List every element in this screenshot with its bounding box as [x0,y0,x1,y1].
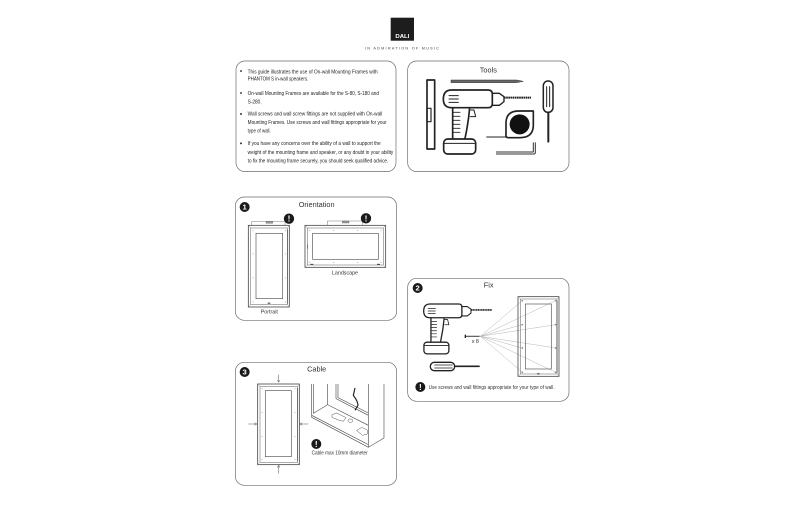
heading: fix: Fix [484,280,494,289]
icon: caution fix: ! [419,382,422,392]
icon: screwdriver [430,362,479,371]
icon: screw [465,335,480,338]
bullet list: This guide illustrates the use of On-wall Mounting Frames with [248,69,378,75]
heading: cable: Cable [307,364,326,373]
logo: DALI [391,18,414,41]
panel: step 1 orientation [235,197,397,320]
icon: allen key [496,142,535,154]
icon: spirit level [427,80,435,149]
icon: screwdriver [543,81,553,142]
diagram: cable recess close-up [312,384,384,447]
label: portrait: Portrait [261,310,278,316]
step badge 2 [413,283,423,293]
bullet list: S-280. [248,99,262,105]
bullet list: Mounting Frames. Use screws and wall fittings appropriate for your [248,120,387,126]
step badge 2: 2 [416,284,420,293]
heading: orientation: Orientation [299,200,335,209]
icon: drill [424,304,492,354]
heading: tools: Tools [480,66,497,75]
icon: caution portrait [284,213,294,224]
diagram: frame with arrows [248,375,308,474]
bullet list: PHANTOM S in-wall speakers. [248,77,308,83]
diagram: fixing points [480,297,559,376]
label: screw quantity: x 8 [472,339,479,345]
note: cable diameter: Cable max 10mm diameter [312,451,368,457]
step badge 3 [240,367,250,377]
panel: introduction notes [236,61,396,172]
tagline: IN ADMIRATION OF MUSIC [365,47,439,51]
icon: caution portrait: ! [288,214,290,224]
icon: caution landscape: ! [365,213,367,223]
bullet list [240,69,394,165]
diagram: landscape frame [305,221,386,267]
icon: caution landscape [361,213,371,223]
panel: step 2 fix [408,278,569,401]
panel: tools [408,61,569,172]
step badge 1: 1 [243,203,248,212]
label: landscape: Landscape [332,271,358,277]
bullet list: On-wall Mounting Frames are available for the S-80, S-180 and [248,91,379,97]
bullet list: to fix the mounting frame securely, you should seek qualified advice. [248,159,388,165]
panel: step 3 cable [235,362,397,485]
icon: caution fix [415,382,425,392]
icon: tape measure [487,111,533,138]
bullet list: type of wall. [248,128,271,134]
note: wall fittings: Use screws and wall fittings appropriate for your type of wall. [429,385,555,391]
bullet list: If you have any concerns over the ability of a wall to support the [248,141,381,147]
logo: DALI: DALI [395,34,410,40]
step badge 3: 3 [243,368,247,377]
bullet list: weight of the mounting frame and speaker, or any doubt in your ability [248,150,394,156]
step badge 1 [240,202,250,212]
diagram: portrait frame [248,221,289,307]
icon: caution cable: ! [315,439,318,449]
icon: caution cable [311,439,321,449]
icon: pencil [451,80,523,83]
bullet list: Wall screws and wall screw fittings are not supplied with On-wall [248,112,382,118]
icon: drill [443,90,531,154]
